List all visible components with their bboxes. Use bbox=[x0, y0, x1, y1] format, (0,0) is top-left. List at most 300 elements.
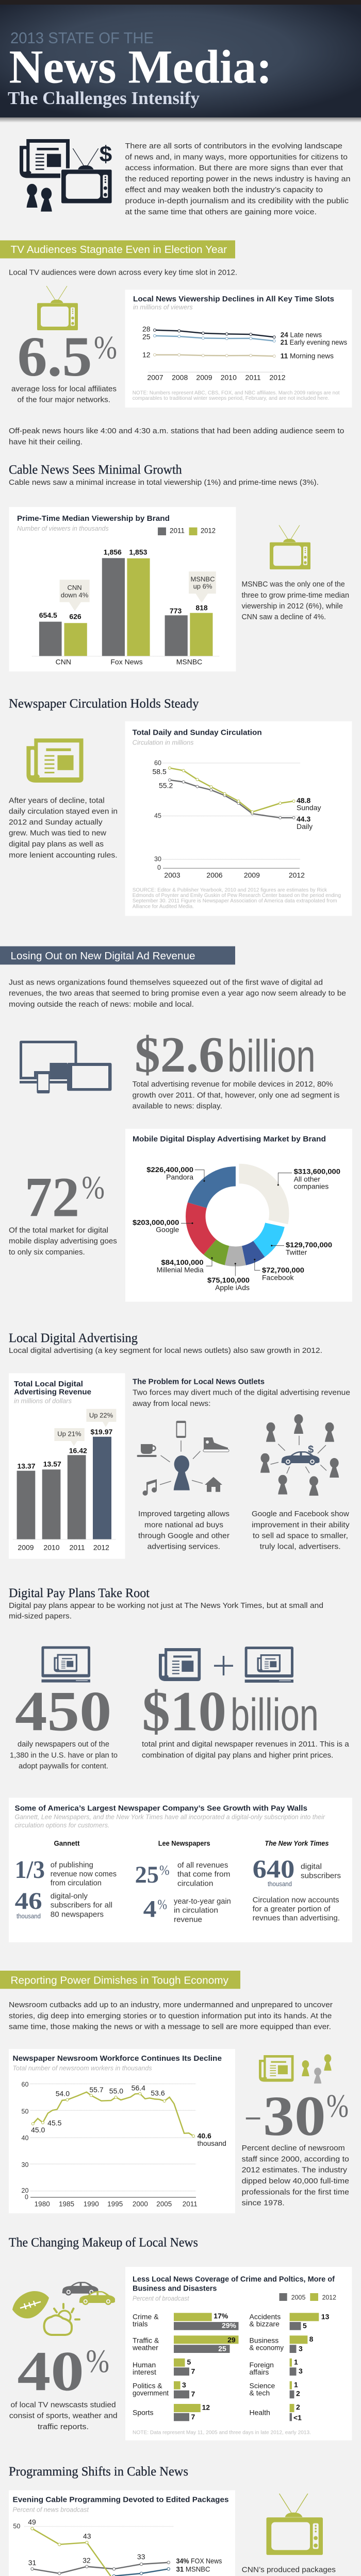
panel: circulation line chart: September 30. 2011 Figure is Newspaper Association of America data extrapolated from bbox=[133, 898, 337, 904]
panel: local news viewership line chart: 21 Early evening news bbox=[281, 338, 347, 346]
panel: newsroom workforce line chart: Newspaper Newsroom Workforce Continues Its Decline bbox=[12, 2054, 222, 2063]
panel: local news viewership line chart: 2009 bbox=[196, 373, 212, 381]
panel: circulation line chart bbox=[125, 721, 352, 916]
right column bars: <1 bbox=[293, 2413, 302, 2421]
left column bars: 29 bbox=[227, 2335, 236, 2344]
panel: newsroom workforce line chart: 0 bbox=[25, 2193, 28, 2200]
column: Lee Newspapers: Lee Newspapers bbox=[158, 1839, 210, 1848]
panel: newsroom workforce line chart: 60 bbox=[22, 2081, 28, 2088]
text: off-peak news: have hit their ceiling. bbox=[9, 437, 83, 446]
panel: local news coverage bar chart: Less Local News Coverage of Crime and Poltics, More of bbox=[133, 2275, 335, 2283]
text: digital pay plans: mid-sized papers. bbox=[9, 1612, 72, 1621]
donut labels: $313,600,000 bbox=[294, 1167, 340, 1175]
left column bars: 7 bbox=[191, 2367, 195, 2375]
column: Lee Newspapers: 4 bbox=[143, 1896, 157, 1923]
text: newsroom cutbacks: stories, dig deep into emerging stories or to question information put into its hands. At the bbox=[9, 2011, 332, 2020]
text: circulation: grew. Much was tied to new bbox=[9, 829, 106, 838]
icon: phone bbox=[176, 1421, 186, 1438]
callout: CNN down bbox=[60, 580, 90, 611]
stat: 40 percent: 40 bbox=[18, 2340, 84, 2402]
panel: newsroom workforce line chart: 1995 bbox=[107, 2200, 123, 2208]
right column bars: Science bbox=[250, 2381, 275, 2389]
stat: 450: daily newspapers out of the bbox=[18, 1740, 109, 1749]
column: Lee Newspapers: % bbox=[159, 1862, 170, 1878]
column: Lee Newspapers bbox=[135, 1839, 231, 1924]
column: The New York Times: 640 bbox=[253, 1854, 294, 1883]
section banner: digital ad revenue: Losing Out on New Digital Ad Revenue bbox=[10, 951, 195, 962]
callout: up 21 percent bbox=[54, 1428, 85, 1446]
text: newsroom cutbacks bbox=[9, 2001, 333, 2031]
left column bars: 25 bbox=[218, 2344, 226, 2352]
stat: 2.6 billion: available to news: display. bbox=[133, 1102, 222, 1111]
text: improved targeting: advertising services. bbox=[147, 1543, 220, 1551]
text: digital pay plans bbox=[9, 1601, 323, 1621]
stat: 40 percent: traffic reports. bbox=[38, 2422, 89, 2431]
panel: circulation line chart: 2009 bbox=[244, 871, 260, 879]
donut labels: All other bbox=[294, 1175, 320, 1183]
right column bars: & tech bbox=[250, 2389, 270, 2397]
panel: newsroom workforce line chart: 53.6 bbox=[151, 2089, 165, 2097]
text: newsroom cutbacks: Newsroom cutbacks add up to an industry, more undermanned and unprepared to uncover bbox=[9, 2001, 333, 2009]
panel: local digital revenue bars: 13.57 bbox=[43, 1460, 61, 1468]
stat: 2.6 billion: Total advertising revenue for mobile devices in 2012, 80% bbox=[133, 1080, 333, 1089]
donut labels: Twitter bbox=[286, 1248, 307, 1256]
panel: cable programming line chart: 32 bbox=[83, 2556, 91, 2564]
stat: minus 30 percent: % bbox=[326, 2087, 349, 2124]
text: digital ad intro bbox=[9, 978, 346, 1009]
donut labels: Facebook bbox=[262, 1273, 294, 1281]
panel: pay wall growth: circulation options for customers. bbox=[14, 1822, 109, 1829]
donut labels: Google bbox=[156, 1226, 179, 1234]
stat: minus 30 percent: staff since 2000, according to bbox=[242, 2155, 349, 2163]
legend: 2012 bbox=[201, 526, 216, 534]
line: late news bbox=[154, 329, 275, 338]
panel: newsroom workforce line chart: 56.4 bbox=[132, 2084, 145, 2092]
text: circulation: After years of decline, total bbox=[9, 796, 105, 805]
left column bars: trials bbox=[133, 2320, 148, 2328]
icon: newspaper, tv, dollar and people bbox=[20, 139, 112, 212]
callout: up 22 percent bbox=[86, 1409, 116, 1427]
left column bars: 3 bbox=[182, 2381, 186, 2389]
icon: green tv right bbox=[270, 525, 310, 569]
text: the problem for local news: away from local news: bbox=[133, 1399, 210, 1408]
panel: circulation line chart: Total Daily and Sunday Circulation bbox=[133, 728, 262, 737]
column: Lee Newspapers: of all revenues bbox=[177, 1861, 228, 1870]
stat: 450 bbox=[10, 1680, 118, 1771]
donut labels: Pandora bbox=[166, 1173, 193, 1181]
right column bars: 2 bbox=[296, 2389, 300, 2398]
stat: 6.5 percent: 6.5 bbox=[18, 325, 92, 388]
text: circulation: daily circulation stayed even in bbox=[9, 807, 118, 816]
intro text bbox=[125, 142, 351, 216]
legend: 2011 bbox=[170, 526, 185, 534]
right column bars: 1 bbox=[294, 2358, 298, 2366]
text: newsroom cutbacks: same time, those making the news or with a message to sell are more equipped than ever. bbox=[9, 2023, 331, 2031]
panel: local news viewership line chart bbox=[125, 290, 352, 408]
panel: prime-time bar chart: MSNBC bbox=[176, 657, 202, 666]
column: Lee Newspapers: revenue bbox=[174, 1916, 202, 1924]
column: Gannett: 80 newspapers bbox=[51, 1910, 104, 1919]
line: MSNBC bbox=[31, 2568, 170, 2576]
right column bars: 13 bbox=[321, 2313, 330, 2321]
donut labels: $226,400,000 bbox=[146, 1165, 193, 1174]
panel: prime-time bar chart: 1,853 bbox=[129, 548, 147, 556]
panel: local news coverage bar chart: Business and Disasters bbox=[133, 2284, 217, 2293]
stat: 450: 1,380 in the U.S. have or plan to bbox=[10, 1751, 118, 1759]
panel: prime-time bar chart: 654.5 bbox=[39, 611, 57, 619]
panel: local digital revenue bars: 2011 bbox=[70, 1543, 85, 1551]
column: Gannett: thousand bbox=[17, 1912, 41, 1920]
right column bars: 3 bbox=[299, 2367, 303, 2375]
text: circulation bbox=[9, 796, 118, 859]
stat: 72 percent: to only six companies. bbox=[9, 1248, 85, 1257]
panel: cable programming line chart: 31 MSNBC bbox=[176, 2565, 210, 2573]
icon: laptop, tablet and phone bbox=[20, 1041, 111, 1093]
intro text: produce in-depth journalism and its credibility with the public bbox=[125, 197, 349, 205]
icon: laptop with newspaper bbox=[41, 1646, 90, 1683]
right column bars bbox=[250, 2313, 330, 2421]
stat: 40 percent bbox=[9, 2340, 118, 2431]
text: off-peak news: Off-peak news hours like 4:00 and 4:30 a.m. stations that had been adding audience seem to bbox=[9, 427, 344, 435]
right column bars: 2 bbox=[296, 2403, 300, 2411]
stat: 2.6 billion: billion bbox=[227, 1030, 316, 1081]
panel: local news coverage bar chart: Percent of broadcast bbox=[133, 2295, 189, 2302]
legend: 2012 bbox=[322, 2294, 336, 2301]
column: Lee Newspapers: that come from bbox=[177, 1870, 230, 1879]
panel: local news viewership line chart: 12 bbox=[142, 350, 151, 359]
column: Gannett: of publishing bbox=[51, 1860, 93, 1869]
panel: local news viewership line chart: 25 bbox=[142, 333, 151, 341]
stat: 72 percent: 72 bbox=[25, 1166, 79, 1229]
panel: local news viewership line chart: 24 Late news bbox=[281, 330, 322, 338]
panel: newsroom workforce line chart: 50 bbox=[22, 2108, 28, 2115]
text: digital ad intro: moving outside the reach of news: mobile and local. bbox=[9, 1000, 194, 1009]
column: Lee Newspapers: % bbox=[157, 1897, 167, 1912]
panel: newsroom workforce line chart bbox=[9, 2049, 235, 2213]
stat: 40 percent: of local TV newscasts studied bbox=[10, 2400, 116, 2409]
section banner: reporting power bbox=[0, 1971, 240, 1989]
heading: newspaper circulation: Newspaper Circulation Holds Steady bbox=[9, 697, 199, 710]
stat: minus 30 percent: 30 bbox=[263, 2084, 326, 2147]
donut labels: $75,100,000 bbox=[207, 1276, 250, 1284]
panel: cable programming line chart: 49 bbox=[28, 2518, 36, 2526]
panel: newsroom workforce line chart: 20 bbox=[22, 2187, 28, 2194]
heading: programming shifts: Programming Shifts in Cable News bbox=[9, 2465, 188, 2479]
panel: prime-time bar chart: 626 bbox=[69, 613, 81, 621]
line: early evening news bbox=[154, 334, 275, 342]
donut labels: $72,700,000 bbox=[262, 1266, 304, 1274]
panel: prime-time bar chart bbox=[9, 507, 236, 671]
panel: prime-time bar chart: 773 bbox=[170, 606, 182, 615]
panel: local news viewership line chart: 11 Morning news bbox=[281, 351, 334, 360]
stat: minus 30 percent: 2012 estimates. The industry bbox=[242, 2166, 348, 2175]
panel: local digital revenue bars: 2010 bbox=[43, 1543, 60, 1551]
stat: 25 percent: CNN’s produced packages bbox=[242, 2565, 336, 2574]
icon: house bbox=[205, 1477, 222, 1492]
panel: newsroom workforce line chart: Total number of newsroom workers in thousands bbox=[12, 2064, 152, 2072]
panel: pay wall growth: Some of America’s Largest Newspaper Company’s See Growth with Pay Walls bbox=[14, 1804, 307, 1812]
panel: prime-time bar chart: 818 bbox=[195, 603, 208, 612]
intro text: effect and may weaken both the industry’s capacity to bbox=[125, 185, 323, 194]
panel: local news viewership line chart: 2007 bbox=[147, 373, 163, 381]
panel: prime-time bar chart: Number of viewers in thousands bbox=[17, 525, 109, 532]
text: MSNBC note: viewership in 2012 (6%), while bbox=[241, 602, 343, 611]
panel: local digital revenue bars: in millions of dollars bbox=[14, 1397, 72, 1404]
stat: 10 billion: combination of digital pay plans and higher print prices. bbox=[142, 1751, 333, 1759]
left column bars: 7 bbox=[191, 2413, 195, 2421]
stat: 2.6 billion: $2.6 bbox=[135, 1027, 224, 1083]
stat: 450: 450 bbox=[15, 1680, 111, 1743]
right column bars: 3 bbox=[299, 2344, 303, 2352]
panel: local news viewership line chart: 2011 bbox=[245, 373, 261, 381]
stat: 72 percent bbox=[9, 1166, 117, 1257]
text: off-peak news bbox=[9, 427, 344, 446]
column: Lee Newspapers: 25 bbox=[135, 1861, 159, 1888]
left column bars: 29% bbox=[222, 2321, 237, 2329]
text: local digital growth: Local digital advertising (a key segment for local news outlets) also saw growth in 2012. bbox=[9, 1346, 322, 1355]
panel: circulation line chart: Daily bbox=[297, 822, 313, 831]
panel: newsroom workforce line chart: 45.0 bbox=[31, 2126, 45, 2134]
right column bars: 5 bbox=[303, 2321, 307, 2330]
text: google and facebook: Google and Facebook show bbox=[252, 1510, 349, 1518]
donut labels: Millenial Media bbox=[157, 1265, 204, 1274]
panel: cable programming line chart: 33 bbox=[137, 2552, 145, 2561]
panel: local news viewership line chart: 2012 bbox=[269, 373, 286, 381]
left column bars: weather bbox=[132, 2344, 158, 2352]
icon: green newspaper bbox=[26, 738, 84, 783]
panel: local digital revenue bars: 13.37 bbox=[17, 1462, 36, 1470]
text: google and facebook: truly local, advertisers. bbox=[260, 1543, 341, 1551]
stat: 450: adopt paywalls for content. bbox=[19, 1762, 108, 1771]
line: daily bbox=[168, 779, 295, 819]
stat: 10 billion: billion bbox=[231, 1689, 319, 1740]
panel: local digital revenue bars: Total Local Digital bbox=[14, 1380, 83, 1388]
panel: circulation line chart: 60 bbox=[154, 759, 161, 767]
panel: newsroom workforce line chart: 54.0 bbox=[56, 2089, 70, 2097]
left column bars: Politics & bbox=[133, 2381, 162, 2389]
intro text: There are all sorts of contributors in the evolving landscape bbox=[125, 142, 342, 150]
callout: up 21 percent: Up 21% bbox=[57, 1430, 81, 1438]
panel: newsroom workforce line chart: thousand bbox=[198, 2139, 226, 2147]
stat: 10 billion bbox=[142, 1680, 349, 1759]
left column bars: Traffic & bbox=[133, 2336, 159, 2345]
callout: CNN down: CNN bbox=[68, 584, 82, 591]
column: The New York Times: revnues than advertising. bbox=[253, 1914, 340, 1923]
panel: newsroom workforce line chart: 40.6 bbox=[198, 2132, 211, 2140]
text: google and facebook bbox=[252, 1510, 350, 1551]
text: MSNBC note: CNN saw a decline of 4%. bbox=[241, 613, 326, 621]
icon: large green tv bbox=[266, 2494, 323, 2555]
column: The New York Times: thousand bbox=[268, 1880, 292, 1888]
panel: local news viewership line chart: NOTE: Numbers represent ABC, CBS, FOX, and NBC affiliates. March 2009 ratings are not bbox=[133, 389, 340, 396]
line: CNN bbox=[31, 2527, 170, 2576]
column: Lee Newspapers: circulation bbox=[177, 1879, 213, 1888]
right column bars: Foreign bbox=[250, 2361, 274, 2369]
panel: circulation line chart: 30 bbox=[154, 856, 161, 863]
heading: changing makeup: The Changing Makeup of Local News bbox=[9, 2236, 198, 2250]
text: MSNBC note: three to grow prime-time median bbox=[241, 591, 349, 600]
column: The New York Times: subscribers bbox=[301, 1871, 341, 1880]
donut labels: $203,000,000 bbox=[133, 1218, 179, 1227]
stat: minus 30 percent: dipped below 40,000 full-time bbox=[242, 2177, 349, 2185]
panel: circulation line chart: Circulation in millions bbox=[133, 739, 194, 747]
right column bars: Accidents bbox=[250, 2313, 281, 2321]
left column bars: interest bbox=[133, 2368, 156, 2376]
text: google and facebook: improvement in their ability bbox=[252, 1520, 350, 1529]
icon: newspaper with people bbox=[259, 2054, 332, 2083]
column: The New York Times: The New York Times bbox=[265, 1839, 329, 1848]
arrows bbox=[160, 1440, 203, 1485]
panel: circulation line chart: 55.2 bbox=[159, 781, 173, 789]
callout: MSNBC up: up 6% bbox=[193, 582, 212, 590]
text: improved targeting bbox=[138, 1510, 229, 1551]
panel: prime-time bar chart: Prime-Time Median Viewership by Brand bbox=[17, 514, 170, 523]
column: Gannett: Gannett bbox=[54, 1839, 80, 1848]
stat: minus 30 percent: Percent decline of newsroom bbox=[242, 2144, 345, 2153]
panel: circulation line chart: Sunday bbox=[297, 804, 321, 812]
callout: MSNBC up: MSNBC bbox=[191, 575, 215, 583]
left column bars: Crime & bbox=[133, 2313, 159, 2321]
panel: newsroom workforce line chart: 2011 bbox=[183, 2200, 198, 2208]
icon: consumer with targeted interests bbox=[137, 1421, 229, 1496]
panel: newsroom workforce line chart: 55.0 bbox=[109, 2087, 123, 2095]
stat: 72 percent: Of the total market for digital bbox=[9, 1226, 108, 1234]
panel: newsroom workforce line chart: 1990 bbox=[84, 2200, 99, 2208]
legend bbox=[280, 2293, 336, 2301]
stat: 72 percent: % bbox=[81, 1169, 105, 1206]
heading: cable news: Cable News Sees Minimal Growth bbox=[9, 463, 182, 477]
icon: music note bbox=[142, 1479, 157, 1496]
panel: local news viewership line chart: comparables to traditional winter sweeps period, February, and are not included here. bbox=[133, 395, 329, 401]
panel: circulation line chart: 2012 bbox=[289, 871, 305, 879]
column: Gannett: revenue now comes bbox=[51, 1870, 117, 1878]
stat: 10 billion: $10 bbox=[142, 1680, 226, 1743]
stat: 10 billion: total print and digital newspaper revenues in 2011. This is a bbox=[142, 1740, 349, 1749]
panel: mobile display donut chart: Mobile Digital Display Advertising Market by Brand bbox=[133, 1134, 326, 1143]
panel: circulation line chart: 0 bbox=[157, 864, 161, 871]
panel: local digital revenue bars: 2012 bbox=[93, 1543, 109, 1551]
panel: mobile display donut chart bbox=[125, 1129, 352, 1302]
stat: 40 percent: % bbox=[86, 2343, 109, 2379]
column: The New York Times: for a greater portion of bbox=[253, 1905, 331, 1913]
right column bars: 1 bbox=[294, 2381, 298, 2389]
text: digital ad intro: revenues, the two areas that seemed to bring promise even a year ago now seem already to be bbox=[9, 989, 346, 998]
column: The New York Times bbox=[253, 1839, 341, 1923]
panel: newsroom workforce line chart: 2000 bbox=[133, 2200, 148, 2208]
donut labels bbox=[133, 1165, 340, 1292]
column: Gannett: subscribers for all bbox=[51, 1901, 112, 1910]
heading: digital pay plans: Digital Pay Plans Take Root bbox=[9, 1586, 150, 1600]
panel: local news coverage bar chart: NOTE: Data represent May 11, 2005 and three days in late 2012, early 2013. bbox=[133, 2430, 311, 2436]
panel: circulation line chart: 2003 bbox=[164, 871, 180, 879]
panel: newsroom workforce line chart: 40 bbox=[22, 2134, 28, 2142]
heading: local digital advertising: Local Digital Advertising bbox=[9, 1331, 138, 1345]
text: improved targeting: more national ad buys bbox=[144, 1520, 223, 1529]
column: The New York Times: Circulation now accounts bbox=[253, 1895, 339, 1904]
right column bars: Business bbox=[250, 2336, 278, 2345]
panel: local news viewership line chart: Local News Viewership Declines in All Key Time Slots bbox=[133, 295, 334, 303]
text: digital ad intro: Just as news organizations found themselves squeezed out of the first wave of digital ad bbox=[9, 978, 323, 987]
text: local tv audiences: Local TV audiences were down across every key time slot in 2012. bbox=[9, 268, 237, 277]
panel: cable programming line chart: Evening Cable Programming Devoted to Edited Packages bbox=[12, 2496, 229, 2504]
right column bars: & economy bbox=[250, 2344, 284, 2352]
section banner: reporting power: Reporting Power Dimishes in Tough Economy bbox=[10, 1975, 228, 1987]
column: Gannett: 1/3 bbox=[15, 1855, 45, 1884]
panel: local digital revenue bars: 2009 bbox=[18, 1543, 34, 1551]
text: improved targeting: Improved targeting allows bbox=[138, 1510, 229, 1518]
column: Gannett: 46 bbox=[15, 1888, 42, 1914]
subtitle: The Challenges Intensify bbox=[8, 88, 200, 108]
left column bars: 7 bbox=[191, 2390, 195, 2398]
line: morning news bbox=[154, 353, 275, 358]
text: improved targeting: through Google and other bbox=[138, 1531, 229, 1540]
panel: local news viewership line chart: 2010 bbox=[221, 373, 237, 381]
panel: newsroom workforce line chart: 1980 bbox=[35, 2200, 50, 2208]
text: google and facebook: to sell ad space to smaller, bbox=[253, 1531, 348, 1540]
panel: newsroom workforce line chart: 2005 bbox=[156, 2200, 172, 2208]
donut labels: companies bbox=[294, 1182, 329, 1190]
section banner: TV audiences bbox=[0, 240, 235, 259]
callout: CNN down: down 4% bbox=[61, 591, 89, 599]
right column bars: Health bbox=[250, 2409, 270, 2417]
panel: prime-time bar chart: CNN bbox=[56, 657, 71, 666]
text: MSNBC note: MSNBC was the only one of the bbox=[241, 580, 345, 589]
panel: prime-time bar chart: 1,856 bbox=[104, 548, 122, 556]
section banner: digital ad revenue bbox=[0, 946, 235, 964]
callout: MSNBC up bbox=[189, 571, 216, 603]
panel: pay wall growth bbox=[9, 1798, 352, 1942]
left column bars bbox=[132, 2312, 238, 2421]
panel: circulation line chart: Edmonds of Poynter and Emily Guskin of Pew Research Center based on the period ending bbox=[133, 892, 341, 899]
icon: coffee cup bbox=[137, 1444, 157, 1457]
stat: 6.5 percent bbox=[11, 325, 117, 404]
stat: minus 30 percent bbox=[242, 2084, 349, 2208]
panel: circulation line chart: Alliance for Audited Media. bbox=[133, 903, 194, 909]
icon: cars, football and weather bbox=[12, 2282, 115, 2335]
line: Fox News bbox=[31, 2561, 170, 2575]
icon: newspaper plus laptop bbox=[159, 1647, 293, 1683]
text: digital pay plans: Digital pay plans appear to be working not just at The News York Times, but at small and bbox=[9, 1601, 323, 1610]
left column bars: 12 bbox=[202, 2403, 210, 2411]
text: cable news increase: Cable news saw a minimal increase in total viewership (1%) and prime-time news (3%). bbox=[9, 478, 319, 487]
panel: local digital revenue bars: Advertising Revenue bbox=[14, 1388, 91, 1397]
stat: 6.5 percent: of the four major networks. bbox=[18, 396, 110, 404]
icon: car advertising to local people: $ bbox=[308, 1444, 314, 1455]
donut bbox=[186, 1164, 289, 1266]
stat: 40 percent: consist of sports, weather and bbox=[9, 2411, 118, 2420]
panel: newsroom workforce line chart: 55.7 bbox=[89, 2086, 104, 2094]
panel: circulation line chart: 44.3 bbox=[297, 815, 310, 823]
panel: local digital revenue bars: 16.42 bbox=[69, 1446, 87, 1454]
text: circulation: 2012 and Sunday actually bbox=[9, 818, 103, 827]
donut labels: Apple iAds bbox=[215, 1283, 250, 1292]
column: Gannett: from circulation bbox=[51, 1878, 102, 1887]
panel: cable programming line chart: 50 bbox=[13, 2522, 20, 2530]
intro text: of news and, in many ways, more opportunities for citizens to bbox=[125, 152, 348, 161]
legend bbox=[158, 526, 216, 535]
left column bars: 5 bbox=[187, 2358, 191, 2366]
text: the problem for local news: The Problem for Local News Outlets bbox=[133, 1378, 265, 1386]
donut labels: $84,100,000 bbox=[161, 1258, 204, 1266]
right column bars: & bizzare bbox=[250, 2320, 280, 2328]
panel: prime-time bar chart: Fox News bbox=[110, 657, 143, 666]
icon: sneaker bbox=[203, 1437, 229, 1452]
panel: circulation line chart: SOURCE: Editor & Publisher Yearbook, 2010 and 2012 figures are estimates by Rick bbox=[133, 887, 327, 893]
title: News Media: bbox=[9, 41, 272, 93]
panel: newsroom workforce line chart: 30 bbox=[22, 2161, 28, 2168]
panel: newsroom workforce line chart: 1985 bbox=[59, 2200, 74, 2208]
text: the problem for local news: Two forces may divert much of the digital advertising revenue bbox=[133, 1388, 350, 1397]
